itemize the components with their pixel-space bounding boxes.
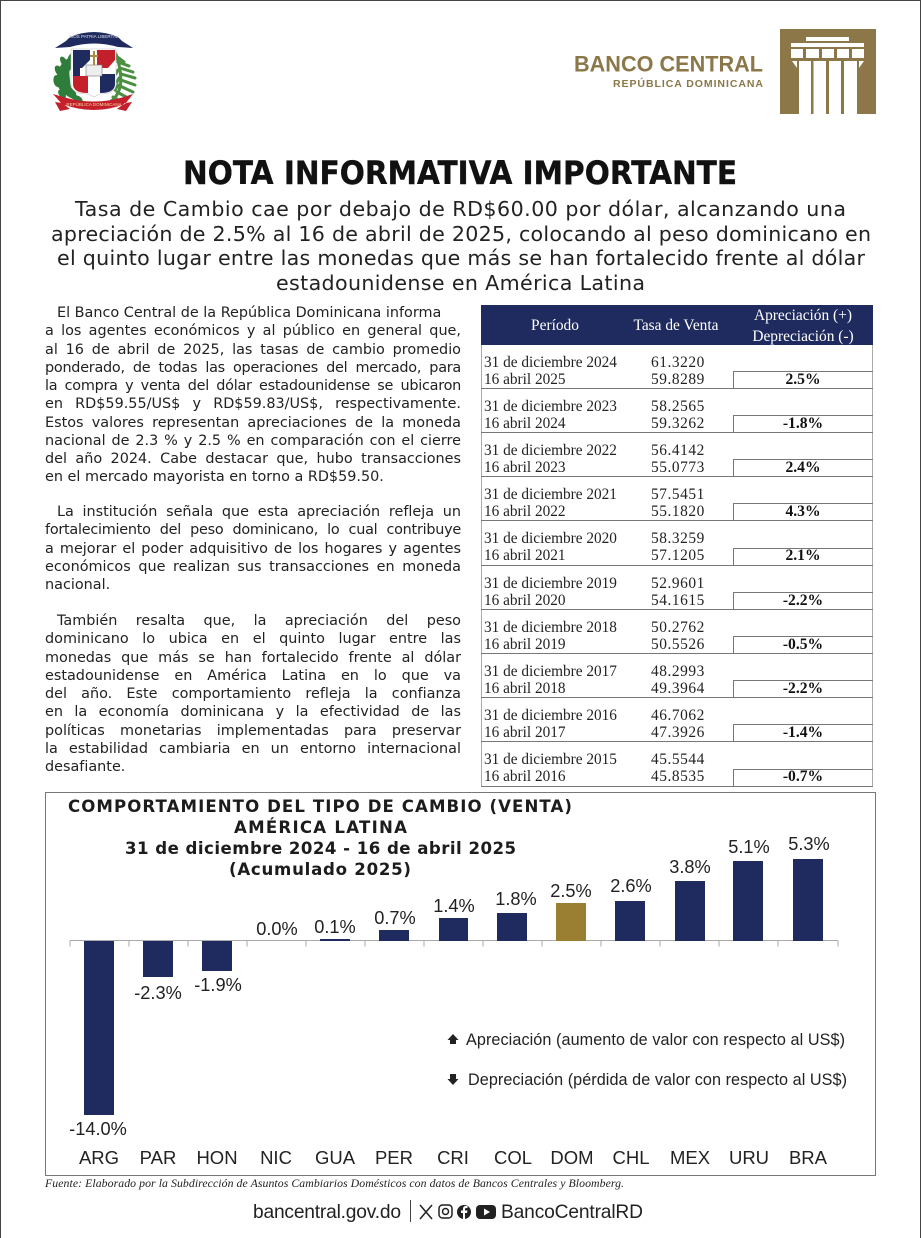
row 2023: 31 de diciembre 2022: [484, 442, 617, 459]
bar chart: 5.1%: [728, 837, 770, 857]
row 2018: [481, 663, 873, 698]
text block: paragraph 3: políticas monetarias implementadas para preservar: [45, 722, 461, 738]
icon: YouTube: [476, 1205, 496, 1219]
text block: paragraph 1: al 16 de abril de 2025, las tasas de cambio promedio: [45, 342, 461, 358]
bar chart: MEX: [670, 1147, 710, 1168]
bar chart: 1.8%: [495, 889, 537, 909]
text block: paragraph 3: desafiante.: [45, 759, 125, 775]
bar chart: -14.0%: [69, 1119, 127, 1139]
row 2025: [481, 354, 873, 388]
row 2017: 31 de diciembre 2016: [484, 707, 617, 724]
chart heading: 31 de diciembre 2024 - 16 de abril 2025: [125, 839, 516, 858]
row 2024: [481, 398, 873, 432]
row 2020: 52.9601: [651, 575, 705, 592]
subtitle: apreciación de 2.5% al 16 de abril de 2025, colocando al peso dominicano en: [51, 222, 871, 246]
logo: Banco Central wordmark: BANCO CENTRAL: [574, 52, 763, 76]
bar chart: 1.4%: [433, 896, 475, 916]
text block: paragraph 3: del año. Este comportamiento refleja la confianza: [45, 686, 461, 702]
bar chart: URU: [729, 1147, 769, 1168]
row 2021: 57.1205: [651, 547, 705, 564]
row 2024: 31 de diciembre 2023: [484, 398, 617, 415]
row 2018: 16 abril 2018: [484, 680, 566, 697]
row 2023: 55.0773: [651, 459, 705, 476]
row 2025: 59.8289: [651, 371, 705, 388]
bar chart: 3.8%: [669, 857, 711, 877]
footer: website and social media: BancoCentralRD: [501, 1202, 643, 1223]
icon: Facebook: [457, 1205, 471, 1219]
row 2020: 16 abril 2020: [484, 592, 566, 609]
bar chart: 2.6%: [610, 876, 652, 896]
logo: Banco Central wordmark: [574, 52, 763, 90]
row 2020: -2.2%: [783, 592, 823, 609]
text block: paragraph 2: La institución señala que esta apreciación refleja un: [57, 504, 461, 520]
row 2025: 2.5%: [785, 371, 821, 388]
row 2016: 31 de diciembre 2015: [484, 751, 617, 768]
subtitle: Tasa de Cambio cae por debajo de RD$60.00 por dólar, alcanzando una: [74, 197, 846, 221]
row 2024: 59.3262: [651, 415, 705, 432]
row 2017: -1.4%: [783, 724, 823, 741]
row 2018: 48.2993: [651, 663, 705, 680]
text block: paragraph 3: en la economía dominicana y la efectividad de las: [45, 704, 461, 720]
text block: paragraph 2: nacional.: [45, 577, 110, 593]
bar chart: 0.7%: [374, 908, 416, 928]
row 2019: [481, 619, 873, 654]
text block: paragraph 3: dominicano lo ubica en el quinto lugar entre las: [45, 631, 461, 647]
row 2017: [481, 707, 873, 742]
row 2016: 45.5544: [651, 751, 705, 768]
row 2017: 46.7062: [651, 707, 705, 724]
text block: paragraph 3: También resalta que, la apreciación del peso: [57, 613, 461, 629]
source note: Fuente: Elaborado por la Subdirección de Asuntos Cambiarios Domésticos con datos de Bancos Centrales y Bloomberg.: [44, 1176, 624, 1190]
row 2024: 58.2565: [651, 398, 705, 415]
text block: paragraph 1: Estos valores representan apreciaciones de la moneda: [45, 414, 461, 430]
palm frond: [110, 54, 135, 102]
panel: exchange rate table: [481, 305, 873, 786]
row 2016: [481, 751, 873, 786]
row 2016: 16 abril 2016: [484, 768, 566, 785]
text block: paragraph 1: a los agentes económicos y al público en general que,: [45, 323, 461, 339]
shield: [71, 49, 116, 97]
table header: [481, 305, 873, 345]
row 2024: 16 abril 2024: [484, 415, 566, 432]
row 2016: 45.8535: [651, 768, 705, 785]
row 2022: [481, 486, 873, 520]
table header: Depreciación (-): [752, 328, 854, 345]
row 2020: 31 de diciembre 2019: [484, 575, 617, 592]
chart heading: (Acumulado 2025): [229, 860, 411, 879]
table header: Apreciación (+): [754, 307, 852, 324]
table header: Tasa de Venta: [634, 317, 719, 334]
subtitle: el quinto lugar entre las monedas que más se han fortalecido frente al dólar: [57, 246, 866, 270]
row 2022: 55.1820: [651, 503, 705, 520]
row 2025: 16 abril 2025: [484, 371, 566, 388]
chart heading: AMÉRICA LATINA: [234, 818, 407, 837]
text block: paragraph 3: estadounidense en América Latina en lo que va: [45, 668, 461, 684]
text block: paragraph 3: monedas que más se han fortalecido frente al dólar: [45, 650, 461, 666]
text block: paragraph 1: nacional de 2.3 % y 2.5 % en comparación con el cierre: [45, 433, 461, 449]
row 2016: -0.7%: [783, 768, 823, 785]
row 2019: 31 de diciembre 2018: [484, 619, 617, 636]
text block: paragraph 2: [45, 504, 461, 593]
row 2024: -1.8%: [783, 415, 823, 432]
row 2019: -0.5%: [783, 636, 823, 653]
row 2017: 47.3926: [651, 724, 705, 741]
text block: paragraph 1: del año 2024. Cabe destacar que, hubo transacciones: [45, 451, 461, 467]
bar chart: NIC: [260, 1147, 292, 1168]
row 2021: 58.3259: [651, 530, 705, 547]
text block: paragraph 2: a mejorar el poder adquisitivo de los hogares y agentes: [45, 540, 461, 556]
text block: paragraph 1: la compra y venta del dólar estadounidense se ubicaron: [45, 378, 461, 394]
subtitle: estadounidense en América Latina: [276, 271, 645, 295]
row 2021: 2.1%: [785, 547, 821, 564]
row 2022: 57.5451: [651, 486, 705, 503]
text block: paragraph 1: en RD$59.55/US$ y RD$59.83/US$, respectivamente.: [45, 396, 461, 412]
row 2018: 31 de diciembre 2017: [484, 663, 617, 680]
footer: website and social media: bancentral.gov.do: [253, 1202, 401, 1223]
row 2023: 56.4142: [651, 442, 705, 459]
row 2019: 16 abril 2019: [484, 636, 566, 653]
legend: appreciation: Apreciación (aumento de valor con respecto al US$): [466, 1031, 845, 1049]
footer: website and social media: [253, 1200, 643, 1223]
row 2020: [481, 575, 873, 610]
bottom ribbon: REPÚBLICA DOMINICANA: [66, 101, 122, 107]
bar chart: 5.3%: [788, 834, 830, 854]
bar chart: DOM: [550, 1147, 594, 1168]
row 2023: 2.4%: [785, 459, 821, 476]
bar chart: PAR: [140, 1147, 176, 1168]
bar chart: PER: [375, 1147, 413, 1168]
subtitle: [51, 197, 871, 295]
icon: X: [420, 1205, 432, 1219]
icon: Instagram: [439, 1205, 452, 1218]
text block: paragraph 1: en el mercado mayorista en torno a RD$59.50.: [45, 469, 384, 485]
row 2025: 61.3220: [651, 354, 705, 371]
row 2017: 16 abril 2017: [484, 724, 566, 741]
bar chart: 0.0%: [256, 919, 298, 939]
text block: paragraph 2: económicos que realizan sus transacciones en moneda: [45, 559, 461, 575]
text block: paragraph 3: la estabilidad cambiaria en un entorno internacional: [45, 741, 461, 757]
panel: Latin America exchange rate chart: [46, 792, 876, 1176]
bar chart: 2.5%: [550, 881, 592, 901]
bar chart: COL: [494, 1147, 532, 1168]
top ribbon: DIOS PATRIA LIBERTAD: [69, 34, 120, 39]
row 2022: 31 de diciembre 2021: [484, 486, 617, 503]
bar chart: ARG: [79, 1147, 119, 1168]
title: NOTA INFORMATIVA IMPORTANTE: [183, 154, 737, 192]
text block: paragraph 2: fortalecimiento del peso dominicano, lo cual contribuye: [45, 522, 461, 538]
chart heading: [68, 797, 572, 879]
row 2021: [481, 530, 873, 566]
bar chart: CHL: [612, 1147, 650, 1168]
row 2018: 49.3964: [651, 680, 705, 697]
bar chart: -2.3%: [134, 983, 182, 1003]
row 2022: 4.3%: [785, 503, 821, 520]
row 2018: -2.2%: [783, 680, 823, 697]
row 2019: 50.5526: [651, 636, 705, 653]
bar chart: CRI: [437, 1147, 469, 1168]
row 2023: 16 abril 2023: [484, 459, 566, 476]
row 2020: 54.1615: [651, 592, 705, 609]
laurel branch: [53, 52, 84, 104]
row 2025: 31 de diciembre 2024: [484, 354, 617, 371]
row 2023: [481, 442, 873, 476]
bar chart: BRA: [789, 1147, 828, 1168]
row 2022: 16 abril 2022: [484, 503, 566, 520]
chart heading: COMPORTAMIENTO DEL TIPO DE CAMBIO (VENTA): [68, 797, 572, 816]
row 2019: 50.2762: [651, 619, 705, 636]
text block: paragraph 1: El Banco Central de la República Dominicana informa: [57, 305, 441, 321]
bar chart: [69, 834, 838, 1168]
text block: paragraph 1: [45, 305, 461, 485]
text block: paragraph 1: ponderado, de todas las operaciones del mercado, para: [45, 360, 461, 376]
table header: Período: [531, 317, 579, 334]
logo: Banco Central wordmark: REPÚBLICA DOMINICANA: [613, 77, 763, 90]
text block: paragraph 3: [45, 613, 462, 775]
bar chart: HON: [196, 1147, 238, 1168]
row 2021: 31 de diciembre 2020: [484, 530, 617, 547]
bar chart: GUA: [315, 1147, 356, 1168]
bar chart: -1.9%: [194, 975, 242, 995]
legend: depreciation: Depreciación (pérdida de valor con respecto al US$): [468, 1071, 847, 1089]
icon: Dominican Republic coat of arms: [53, 32, 135, 111]
bar chart: 0.1%: [314, 917, 356, 937]
row 2021: 16 abril 2021: [484, 547, 566, 564]
logo: column building icon: [780, 29, 876, 114]
